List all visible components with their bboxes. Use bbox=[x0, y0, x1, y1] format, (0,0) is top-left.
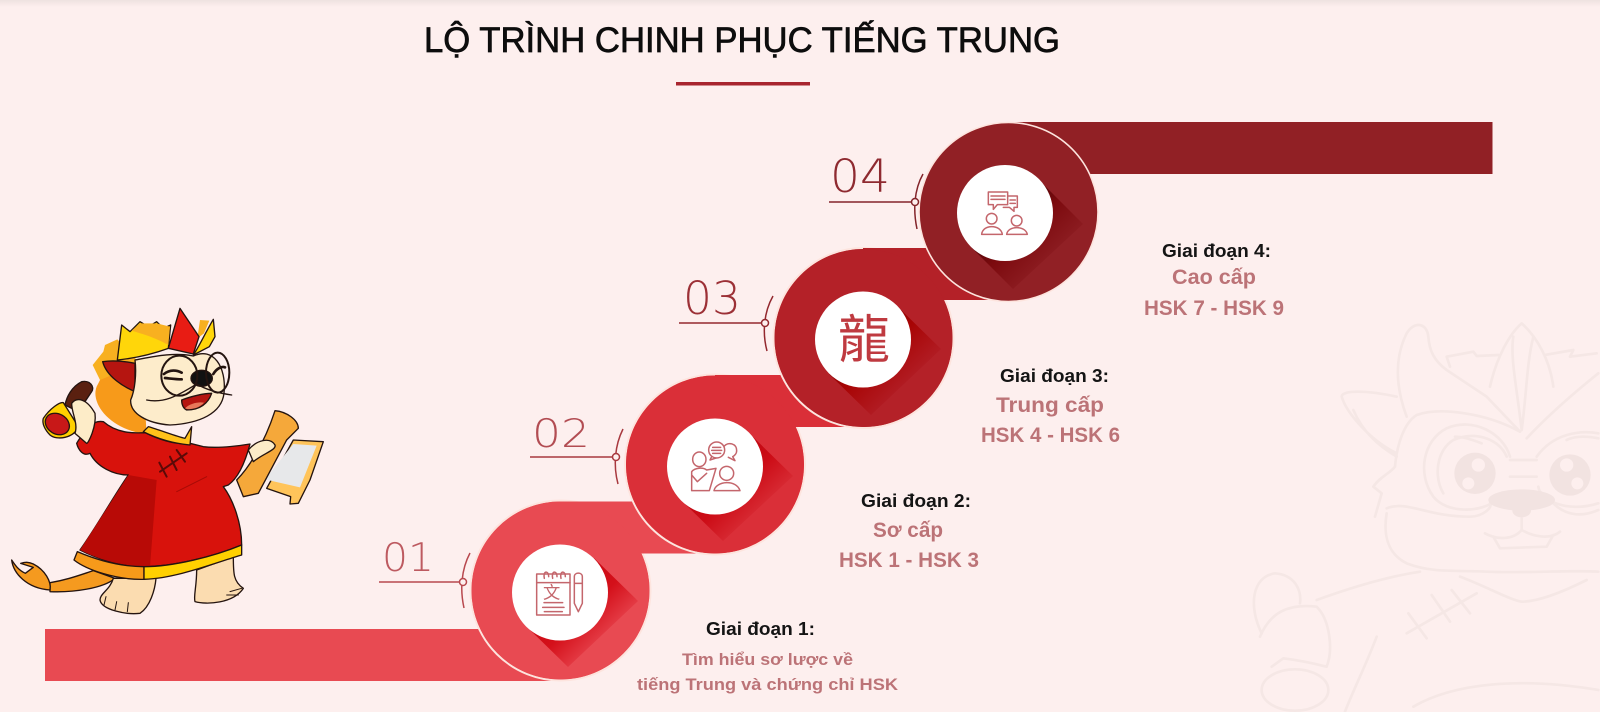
icon: notebook and pen: 文 bbox=[543, 579, 560, 604]
step 2 number and leader bbox=[530, 412, 623, 484]
step 3 number and leader bbox=[679, 272, 773, 351]
step 4 long shadow bbox=[971, 184, 1078, 286]
stage 4 text bbox=[1144, 241, 1284, 320]
stage 3 text: Trung cấp bbox=[996, 394, 1104, 417]
stage 4 text: HSK 7 - HSK 9 bbox=[1144, 297, 1284, 320]
step 1 number and leader: 01 bbox=[382, 536, 434, 581]
step 2 bbox=[624, 374, 844, 556]
step 2 white circle bbox=[667, 418, 763, 514]
step 4 ribbon bbox=[1008, 122, 1492, 174]
mascot tail bbox=[12, 560, 115, 592]
step 3 disc bbox=[774, 249, 952, 427]
stage 2 text: Giai đoạn 2: bbox=[861, 491, 971, 511]
step 3 white circle bbox=[815, 292, 911, 388]
step 4 bbox=[919, 122, 1492, 302]
step 1 circle outline bbox=[470, 500, 650, 680]
step 3 number and leader: 03 bbox=[683, 272, 741, 325]
step 2 circle outline bbox=[625, 374, 805, 554]
step 2 disc bbox=[626, 376, 804, 554]
step 2 number and leader: 02 bbox=[532, 412, 590, 457]
step 3 bbox=[772, 247, 988, 429]
step 1 long shadow bbox=[526, 558, 638, 667]
background mascot watermark bbox=[1254, 323, 1598, 712]
stage 1 text: tiếng Trung và chứng chỉ HSK bbox=[637, 675, 899, 694]
mascot scroll bbox=[237, 411, 323, 504]
stage 3 text bbox=[981, 366, 1120, 447]
mascot feet bbox=[100, 557, 243, 614]
step 4 disc bbox=[919, 122, 1098, 302]
step 2 ribbon bbox=[715, 375, 875, 427]
stage 1 text bbox=[637, 619, 899, 694]
step 3 long shadow bbox=[829, 306, 941, 415]
stage 2 text bbox=[839, 491, 979, 572]
step 1 number and leader bbox=[379, 536, 470, 608]
step 3 ribbon bbox=[863, 248, 1018, 300]
mascot head bbox=[93, 308, 232, 434]
ribbon start bar bbox=[45, 629, 565, 681]
stage 4 text: Giai đoạn 4: bbox=[1162, 241, 1271, 261]
icon: notebook and pen bbox=[537, 572, 582, 615]
stage 2 text: HSK 1 - HSK 3 bbox=[839, 549, 979, 572]
mascot stamp bbox=[41, 381, 95, 443]
step 1 bbox=[470, 500, 696, 682]
icon: dragon character: 龍 bbox=[838, 298, 890, 373]
step 2 long shadow bbox=[681, 433, 793, 541]
stage 3 text: Giai đoạn 3: bbox=[1000, 366, 1109, 386]
mascot bbox=[12, 308, 323, 614]
title underline bbox=[676, 82, 810, 86]
icon: people talking bbox=[692, 442, 740, 491]
stage 4 text: Cao cấp bbox=[1172, 266, 1256, 289]
stage 3 text: HSK 4 - HSK 6 bbox=[981, 424, 1120, 447]
mascot robe bbox=[74, 421, 250, 579]
step 1 ribbon bbox=[560, 502, 725, 554]
stage 1 text: Giai đoạn 1: bbox=[706, 619, 815, 639]
step 4 number and leader bbox=[829, 150, 923, 229]
stage 1 text: Tìm hiểu sơ lược về bbox=[682, 650, 853, 669]
icon: two people chat bbox=[982, 192, 1027, 234]
step 1 white circle bbox=[512, 544, 608, 640]
step 1 disc bbox=[472, 502, 650, 680]
step 4 number and leader: 04 bbox=[830, 150, 890, 203]
step 3 circle outline bbox=[774, 248, 954, 428]
title: LỘ TRÌNH CHINH PHỤC TIẾNG TRUNG bbox=[424, 20, 1060, 60]
step 4 white circle bbox=[957, 165, 1053, 261]
stage 2 text: Sơ cấp bbox=[873, 519, 943, 542]
